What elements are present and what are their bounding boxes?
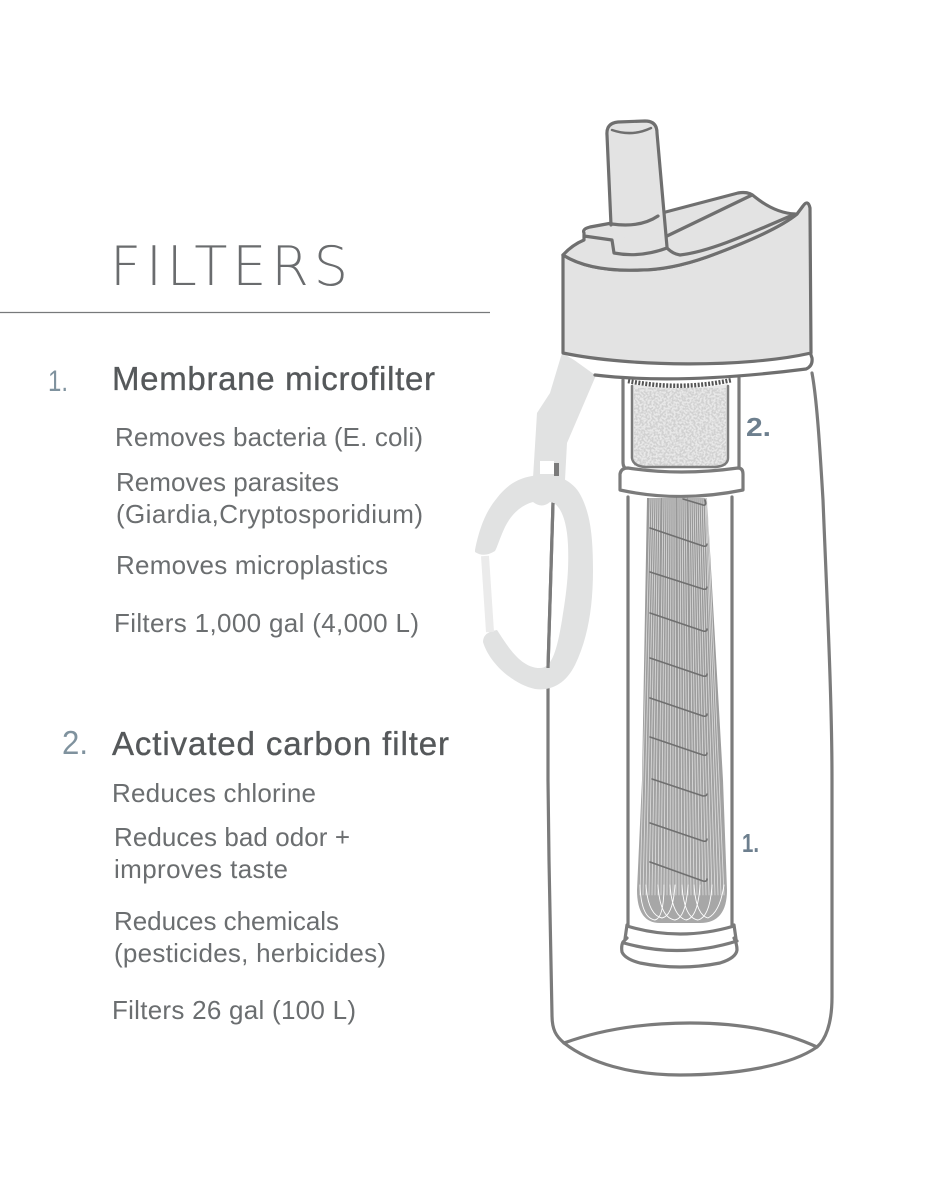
text: removes parasites bbox=[116, 467, 423, 529]
title: FILTERS bbox=[110, 235, 348, 298]
membrane fibers bbox=[637, 498, 727, 923]
text: reduces chemicals bbox=[114, 906, 386, 968]
text: filters 1000 gal: Filters 1,000 gal (4,000 L) bbox=[114, 608, 419, 638]
straw bbox=[607, 121, 667, 247]
heading: activated carbon filter: Activated carbon filter bbox=[112, 725, 449, 762]
number 1: 1. bbox=[48, 365, 68, 398]
text: removes microplastics: Removes microplastics bbox=[116, 550, 388, 580]
activated carbon filter cartridge bbox=[623, 378, 739, 469]
text: reduces chemicals: Reduces chemicals bbox=[114, 906, 339, 936]
text: reduces bad odor bbox=[114, 822, 350, 884]
heading: membrane microfilter: Membrane microfilter bbox=[112, 360, 435, 397]
number 2: 2. bbox=[62, 724, 88, 761]
text: reduces bad odor: improves taste bbox=[114, 854, 288, 884]
text: filters 26 gal: Filters 26 gal (100 L) bbox=[112, 995, 356, 1025]
callout label 2: 2. bbox=[746, 412, 771, 442]
fiber bands bbox=[650, 499, 707, 881]
strap bbox=[533, 353, 597, 480]
upper collar bbox=[620, 468, 743, 496]
text: removes parasites: Removes parasites bbox=[116, 467, 339, 497]
carabiner and strap bbox=[475, 353, 597, 689]
top surface, lid and mouthpiece bbox=[563, 192, 797, 270]
carabiner gate bbox=[485, 556, 490, 632]
membrane filter tube bbox=[628, 497, 732, 925]
text: removes bacteria: Removes bacteria (E. coli) bbox=[115, 422, 423, 452]
text: reduces chlorine: Reduces chlorine bbox=[112, 778, 316, 808]
cap body with top surface bbox=[563, 203, 811, 364]
callout label 1: 1. bbox=[742, 828, 759, 858]
cap ring bbox=[563, 352, 812, 379]
bottle body bbox=[548, 373, 832, 1075]
carbon granules bbox=[634, 388, 726, 466]
text: reduces bad odor: Reduces bad odor + bbox=[114, 822, 350, 852]
lower collar bbox=[622, 925, 737, 967]
panel: membrane microfilter bbox=[48, 360, 435, 638]
carabiner ring bbox=[475, 475, 593, 689]
bottle cap bbox=[563, 121, 812, 379]
text: reduces chemicals: (pesticides, herbicides) bbox=[114, 938, 386, 968]
bottle illustration bbox=[548, 373, 832, 1075]
panel: activated carbon filter bbox=[62, 724, 449, 1025]
text: removes parasites: (Giardia,Cryptosporidium) bbox=[116, 499, 423, 529]
